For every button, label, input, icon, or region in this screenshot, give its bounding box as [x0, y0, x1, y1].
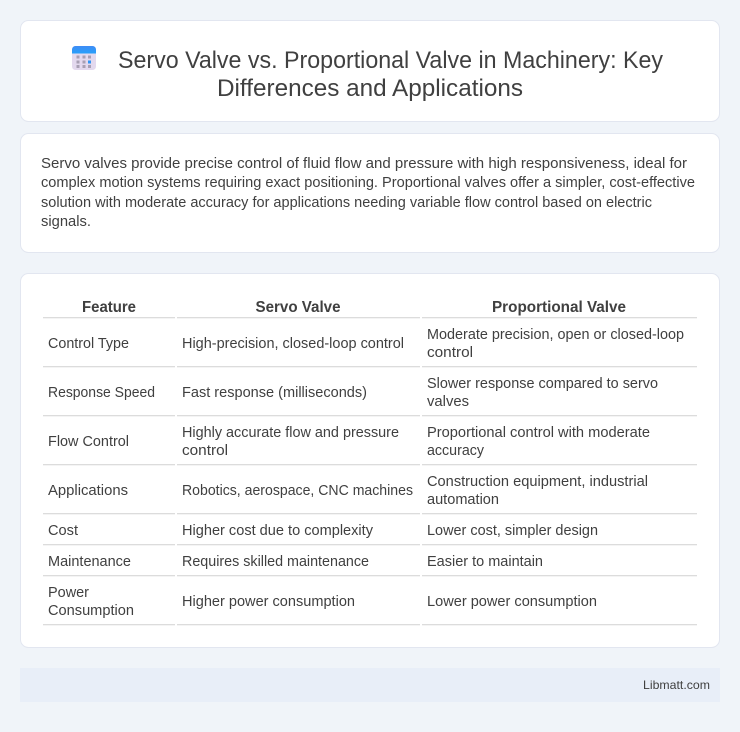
row: maintenance — [48, 554, 543, 570]
row: applications: Construction equipment, industrial — [427, 474, 648, 490]
table header: Proportional Valve — [492, 299, 626, 316]
intro text: Servo valves provide precise control of fluid flow and pressure with high responsiveness, ideal for — [41, 156, 687, 172]
row: response speed: Response Speed — [48, 385, 155, 401]
row: applications — [48, 474, 648, 508]
row: response speed — [48, 376, 658, 410]
title: Differences and Applications — [217, 75, 523, 102]
row: power consumption: Consumption — [48, 603, 134, 619]
row: flow control: Highly accurate flow and pressure — [182, 425, 399, 441]
row: power consumption — [48, 585, 597, 619]
row: response speed: Fast response (milliseconds) — [182, 385, 367, 401]
intro text: complex motion systems requiring exact positioning. Proportional valves offer a simpler, cost-effective — [41, 175, 695, 191]
row: flow control: Proportional control with moderate — [427, 425, 650, 441]
row: maintenance: Requires skilled maintenance — [182, 554, 369, 570]
row: cost: Cost — [48, 523, 78, 539]
intro panel — [20, 134, 720, 252]
intro text: solution with moderate accuracy for applications needing variable flow control based on electric — [41, 195, 652, 211]
row: power consumption: Lower power consumption — [427, 594, 597, 610]
comparison table panel — [20, 274, 720, 648]
row: flow control: accuracy — [427, 443, 485, 459]
row: control type: Moderate precision, open or closed-loop — [427, 327, 684, 343]
row: cost — [48, 523, 598, 539]
row: control type: Control Type — [48, 336, 129, 352]
row: flow control: control — [182, 443, 228, 459]
title — [118, 47, 663, 102]
row: response speed: Slower response compared to servo — [427, 376, 658, 392]
footer — [20, 668, 720, 702]
intro text — [41, 156, 695, 230]
row: applications: Applications — [48, 483, 128, 499]
row: maintenance: Easier to maintain — [427, 554, 543, 570]
row: control type — [48, 327, 684, 361]
footer credit: Libmatt.com — [643, 678, 710, 692]
header panel — [20, 20, 720, 122]
row: power consumption: Power — [48, 585, 89, 601]
row: applications: Robotics, aerospace, CNC machines — [182, 483, 413, 499]
intro text: signals. — [41, 214, 91, 230]
row: cost: Higher cost due to complexity — [182, 523, 374, 539]
table header: Feature — [82, 299, 136, 316]
row: applications: automation — [427, 492, 499, 508]
row: flow control — [48, 425, 650, 459]
row: flow control: Flow Control — [48, 434, 129, 450]
icon: calendar — [72, 46, 96, 70]
row: cost: Lower cost, simpler design — [427, 523, 598, 539]
row: maintenance: Maintenance — [48, 554, 131, 570]
row: response speed: valves — [427, 394, 469, 410]
row: control type: control — [427, 345, 473, 361]
row: control type: High-precision, closed-loop control — [182, 336, 404, 352]
title: Servo Valve vs. Proportional Valve in Machinery: Key — [118, 47, 663, 74]
table header: Servo Valve — [256, 299, 341, 316]
row: power consumption: Higher power consumption — [182, 594, 355, 610]
table header — [82, 299, 626, 316]
